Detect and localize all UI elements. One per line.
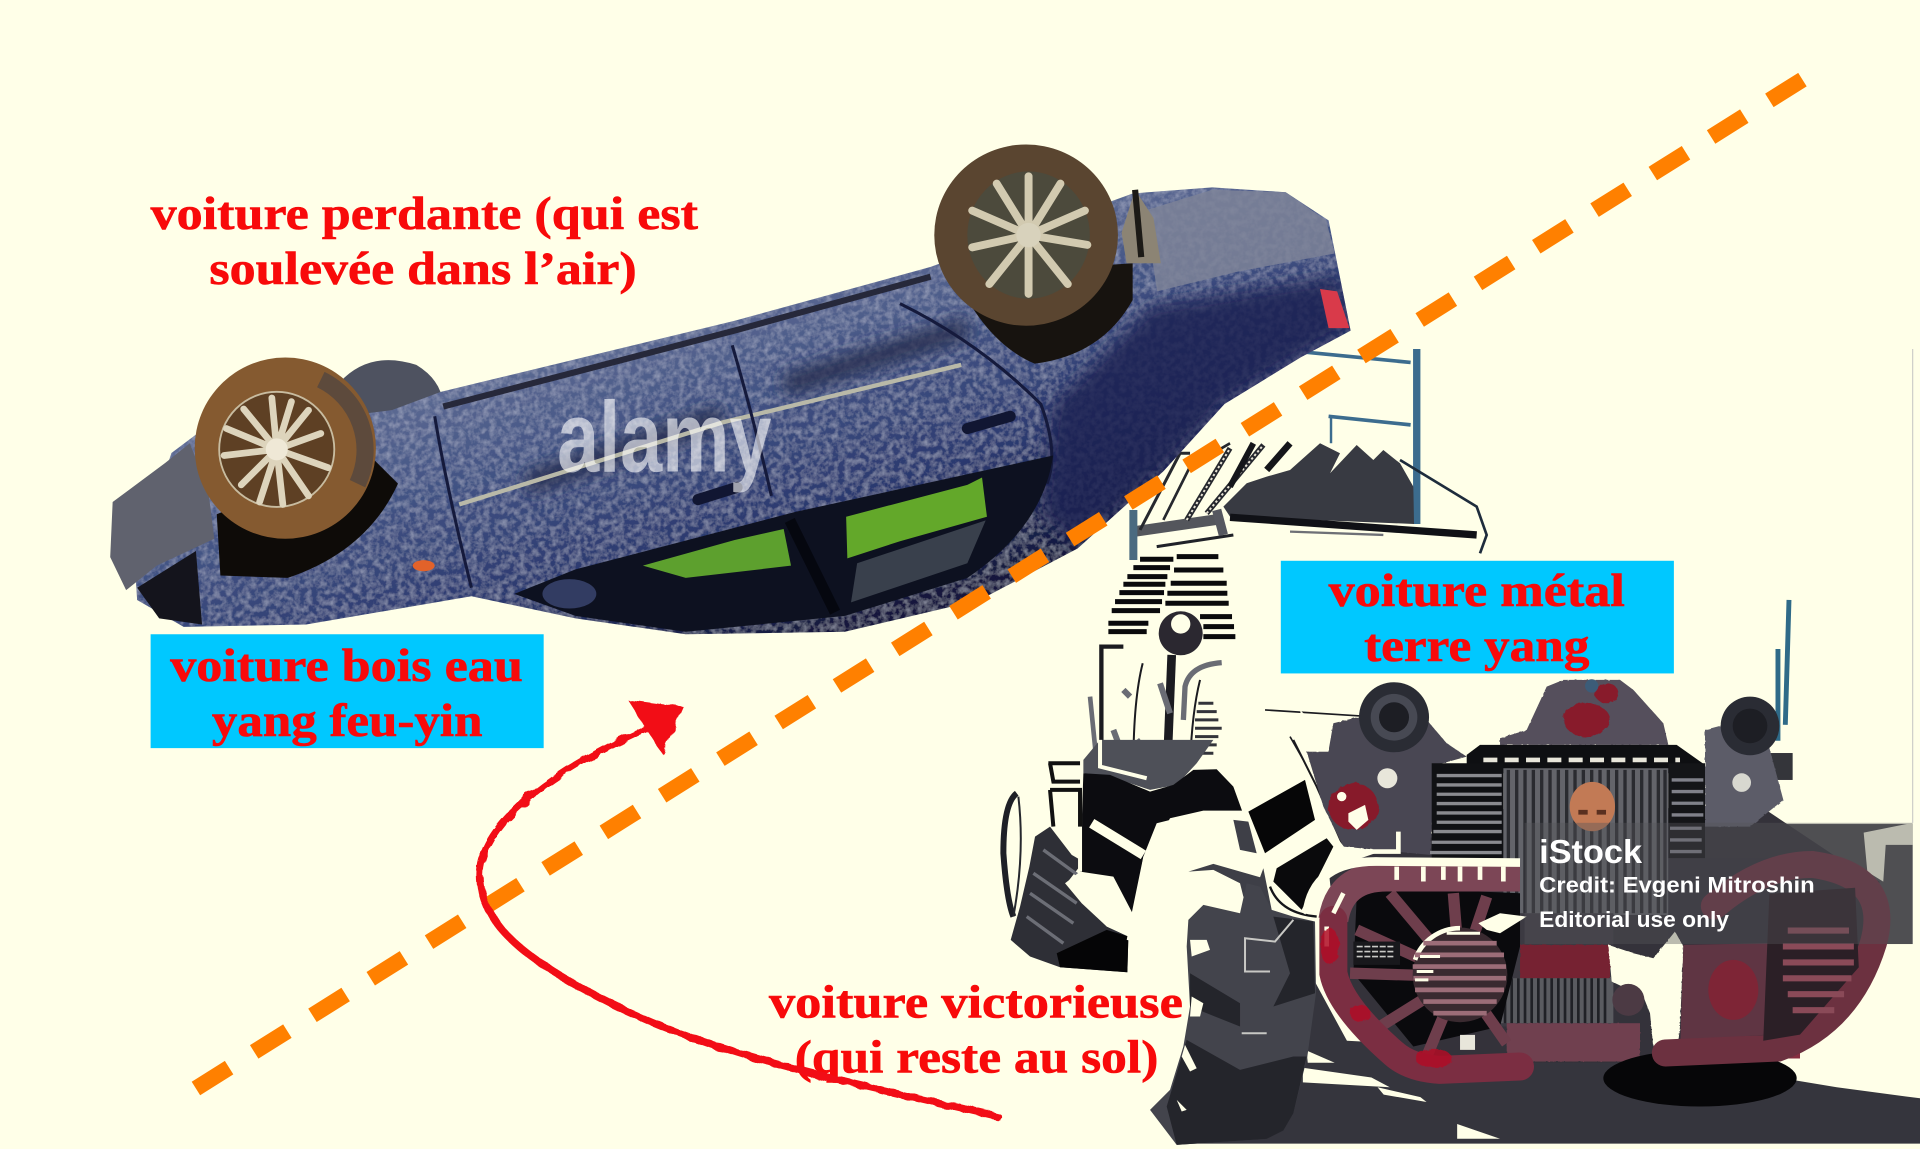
dark door reflection — [527, 328, 967, 484]
cream patches right — [1864, 823, 1913, 882]
caption: voiture perdante: soulevée dans l’air) — [209, 244, 637, 295]
grass reflection large — [846, 478, 987, 558]
right slat bars — [1670, 780, 1703, 852]
rear quarter dark — [1041, 275, 1351, 549]
left headlight — [1359, 682, 1429, 752]
lower bar — [1507, 1023, 1640, 1062]
rear tire shadow — [1057, 930, 1128, 972]
caption: voiture perdante: voiture perdante (qui est — [151, 189, 699, 240]
tail light — [1320, 289, 1349, 328]
fender flakes — [1300, 710, 1368, 830]
indicator light — [413, 560, 435, 571]
cream silhouette — [1127, 812, 1257, 953]
interior spokes — [1350, 893, 1507, 1057]
right bumper loop — [1665, 864, 1877, 1053]
lower radiator bars — [1505, 978, 1605, 1023]
lower strut — [1303, 823, 1398, 913]
glass reflection — [851, 520, 986, 602]
truck: monster vehicle (voiture métal terre yang) — [1003, 349, 1920, 1145]
door handles — [698, 416, 1010, 500]
frame lines — [1080, 740, 1147, 872]
front under shadow — [137, 551, 202, 624]
front wheel — [195, 358, 376, 539]
interior label grille — [1353, 942, 1400, 965]
caption: voiture victorieuse: voiture victorieuse — [769, 977, 1183, 1028]
mid top plate — [1500, 680, 1668, 745]
cream flakes on bumper — [1307, 862, 1520, 913]
tread highlights — [1242, 920, 1293, 1033]
car body — [135, 187, 1351, 634]
dark grille band — [1467, 745, 1705, 773]
upper truck traced parts — [1090, 443, 1487, 767]
cab grey panels — [1090, 663, 1222, 763]
window pillar — [790, 520, 835, 612]
tread dark — [1167, 917, 1315, 1145]
lower body mass — [1500, 913, 1613, 1027]
editorial note: Editorial use only — [1539, 907, 1730, 932]
big front wheel — [1150, 883, 1316, 1145]
label box: voiture métal terre yang — [1281, 561, 1674, 673]
top lamp — [1585, 679, 1598, 693]
tow hook — [1612, 984, 1644, 1016]
center mid panel — [1668, 858, 1775, 947]
right fender bolt — [1732, 773, 1751, 792]
bumper interior — [1353, 888, 1520, 1047]
rear wheel — [934, 144, 1118, 326]
arrowhead — [627, 699, 683, 754]
right dark background of watermark area — [1764, 824, 1913, 944]
left slats — [1432, 763, 1503, 858]
right bumper interior — [1763, 888, 1859, 1041]
ground shadow — [1176, 955, 1920, 1144]
round lamp — [1159, 611, 1203, 655]
cream strut — [1092, 823, 1143, 855]
rear fin — [1122, 190, 1161, 263]
roof rack (blue rods) — [1298, 349, 1417, 524]
interior label bars — [1357, 947, 1393, 957]
caption: voiture victorieuse — [769, 977, 1183, 1084]
center white patch — [1608, 932, 1683, 1057]
right post — [1778, 600, 1789, 741]
right headlight — [1721, 697, 1779, 755]
roof rail dark top line — [443, 277, 931, 407]
right slab — [1766, 753, 1793, 780]
small box — [1460, 1035, 1475, 1050]
window black lower — [1273, 838, 1333, 910]
caption: voiture victorieuse: (qui reste au sol) — [795, 1033, 1158, 1084]
label box: voiture bois eau yang feu-yin — [151, 634, 544, 748]
bottom bend line — [1270, 887, 1317, 917]
lower radiator — [1500, 978, 1613, 1023]
far front wheel — [337, 360, 443, 416]
door crease highlight — [459, 365, 961, 504]
rear wheel arch — [955, 263, 1133, 364]
dashed orange diagonal axis — [196, 80, 1802, 1089]
right edge line — [1912, 349, 1914, 823]
rear hub rim — [1003, 793, 1017, 917]
skull eyes — [1578, 810, 1606, 815]
rear fin dark edge — [1135, 190, 1141, 257]
grass reflection small — [643, 529, 791, 578]
trunk highlight — [1145, 190, 1335, 291]
tire cream flecks — [1177, 940, 1210, 1112]
label box: voiture métal terre yang: terre yang — [1364, 621, 1589, 672]
lamp highlight — [1171, 614, 1190, 634]
side stripes — [1193, 703, 1222, 753]
red curved arrow — [480, 699, 998, 1117]
side vent stripes — [1108, 557, 1235, 637]
red block — [1520, 945, 1610, 978]
spare tire on roof — [1223, 443, 1414, 524]
bumper red accents — [1321, 928, 1452, 1068]
right round vent — [1783, 931, 1854, 1010]
radiator — [1503, 768, 1668, 915]
cab frame — [1101, 647, 1360, 767]
right red patch — [1708, 960, 1758, 1020]
overlay — [1524, 823, 1913, 944]
front body traced — [1300, 679, 1800, 1107]
drips — [1327, 867, 1503, 947]
right side strut — [1753, 808, 1794, 894]
overturned car (voiture bois eau yang feu-yin) — [110, 144, 1351, 634]
left fender bolt — [1377, 768, 1397, 788]
truck front base fill — [1329, 808, 1880, 1063]
cream blob — [1065, 872, 1133, 937]
skull — [1570, 782, 1615, 831]
round vent — [1413, 928, 1507, 1022]
rear hub inner — [1013, 797, 1021, 917]
istock logo: iStock — [1539, 834, 1643, 871]
sunlight stripes on ground — [1303, 1051, 1500, 1139]
right tire shadow — [1603, 1050, 1797, 1107]
front wheel arch — [217, 453, 398, 578]
label box: voiture bois eau yang feu-yin: voiture bois eau — [170, 641, 523, 692]
radiator bars — [1508, 770, 1665, 913]
roof rail — [1133, 443, 1487, 560]
right lower bar — [1683, 1024, 1800, 1076]
right body block — [1680, 940, 1787, 1053]
crushed front — [110, 443, 214, 590]
window black upper — [1248, 780, 1315, 853]
upper tire fragments — [1188, 820, 1272, 910]
label box: voiture métal terre yang: voiture métal — [1329, 566, 1625, 617]
chassis dark mass — [1080, 769, 1242, 915]
alamy watermark: alamy — [557, 381, 772, 493]
credit: Credit: Evgeni Mitroshin — [1539, 873, 1815, 898]
rust spots — [1328, 683, 1618, 830]
label box: voiture bois eau yang feu-yin: yang feu-yin — [212, 696, 483, 747]
right slats — [1668, 763, 1705, 858]
side frame box — [1048, 763, 1080, 827]
istock watermark panel — [1524, 823, 1913, 944]
left bumper lower tube — [1333, 920, 1520, 1070]
left fender — [1307, 717, 1467, 855]
radiator top ornament — [1483, 753, 1680, 767]
side windows — [514, 455, 1053, 632]
door seams — [435, 304, 1052, 588]
caption: voiture perdante — [151, 189, 699, 295]
rear tire tread — [1027, 850, 1080, 943]
rear tire — [1011, 827, 1128, 972]
chassis upper fragments — [1083, 740, 1213, 790]
left bumper tube — [1333, 877, 1520, 920]
rear wheel and chassis traced — [1003, 740, 1343, 1145]
right fender — [1705, 723, 1783, 827]
connector flake — [1478, 913, 1527, 933]
side mirror — [542, 579, 596, 609]
left slat bars — [1430, 776, 1502, 853]
body edge — [1293, 740, 1343, 847]
